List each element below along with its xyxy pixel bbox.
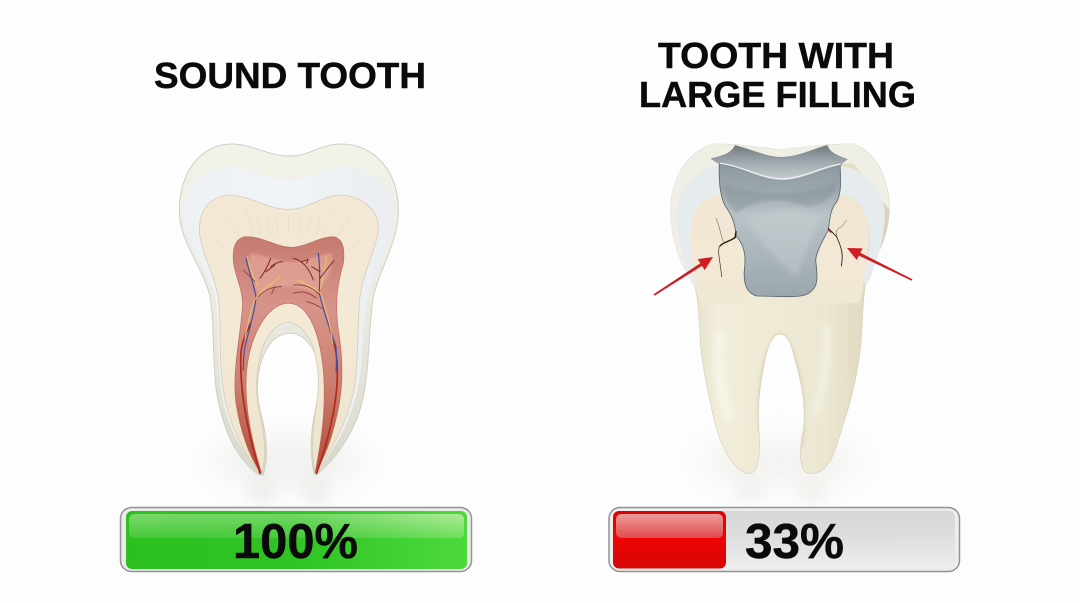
enamel left [677, 166, 721, 285]
metal top rim [711, 145, 847, 181]
bar track [614, 511, 955, 568]
arrow: left crack pointer [654, 257, 713, 296]
title: tooth with large filling: TOOTH WITH [658, 35, 894, 76]
bluish enamel layer [183, 166, 394, 469]
title: tooth with large filling: LARGE FILLING [639, 74, 916, 115]
exposed dentin right [813, 195, 869, 303]
enamel crown cap [667, 140, 897, 290]
cracks left [716, 218, 736, 277]
value 100%: 100% [233, 515, 358, 569]
metal filling body [719, 163, 841, 297]
dentin tubule lines [213, 210, 365, 252]
enamel right [839, 166, 885, 285]
inner arch shading [759, 334, 803, 447]
ground shadow: right tooth [700, 438, 860, 506]
value 33%: 33% [745, 515, 844, 569]
progress bar: 33% [609, 508, 960, 572]
tooth body [671, 144, 889, 474]
title: tooth with large filling [639, 35, 916, 115]
bar gloss red [616, 514, 723, 538]
cracks right [828, 221, 847, 266]
soft root shading and highlights [667, 140, 897, 447]
blood vessels and nerves [241, 253, 337, 473]
arrow: right crack pointer [847, 248, 912, 281]
ground shadow: left tooth [213, 438, 363, 506]
pulp inner glow [249, 253, 332, 297]
metal rim light line [720, 163, 841, 179]
pulp chamber and root canals [233, 237, 344, 473]
progress bar: 100% [120, 508, 472, 572]
metal highlight [747, 210, 820, 277]
title: sound tooth: SOUND TOOTH [154, 55, 426, 96]
dentin [199, 195, 378, 473]
illustration: tooth with large filling [667, 140, 897, 474]
illustration: sound tooth cross-section [179, 144, 398, 475]
bar fill red [613, 511, 726, 568]
outer enamel [179, 144, 398, 475]
bar gloss green [129, 514, 464, 538]
exposed dentin left [691, 195, 750, 303]
metal sheen [723, 182, 837, 213]
bar fill green [126, 511, 467, 569]
